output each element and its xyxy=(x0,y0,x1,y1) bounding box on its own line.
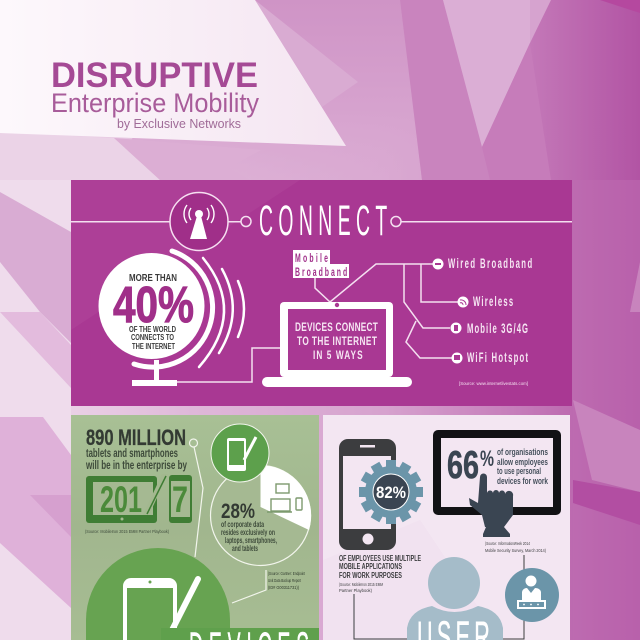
source xyxy=(485,541,546,554)
laptop text: TO THE INTERNET xyxy=(297,336,378,348)
stat text: employees: OF EMPLOYEES USE MULTIPLE xyxy=(339,554,421,563)
subtitle: Enterprise Mobility: Enterprise Mobility xyxy=(51,88,259,118)
icon: tablet 66%: 66 xyxy=(447,444,479,487)
icon: phone and pen circle xyxy=(211,424,269,482)
icon: 2017 tablet and phone: 201 xyxy=(100,479,142,520)
stat: more than 40% xyxy=(113,272,194,351)
stat: 28% circle: of corporate data xyxy=(221,520,264,529)
icon: phone and gear 82% xyxy=(339,439,423,550)
laptop text: IN 5 WAYS xyxy=(313,350,363,362)
icon: gear: 82% xyxy=(376,483,406,502)
icon: large phone circle xyxy=(86,548,230,640)
list: connection types xyxy=(432,257,532,366)
stat text: employees: FOR WORK PURPOSES xyxy=(339,571,402,580)
icon: tablet 66%: allow employees xyxy=(497,457,548,467)
icon: tablet 66% xyxy=(433,430,561,537)
source: (Source: MobileIron 2015 EMM Partner Playbook) xyxy=(85,529,169,534)
wired broadband: Wired Broadband xyxy=(448,257,532,272)
laptop text xyxy=(295,322,379,362)
source: (Source: Gartner: Endpoint xyxy=(268,571,305,577)
label: mobile broadband: Mobile xyxy=(295,252,328,266)
byline: by Exclusive Networks xyxy=(117,117,241,131)
globe xyxy=(98,251,244,386)
icon: 2017 tablet and phone xyxy=(86,474,192,523)
icon: tablet 66%: devices for work xyxy=(497,476,549,486)
source xyxy=(268,571,305,591)
icon: 2017 tablet and phone: 7 xyxy=(172,479,188,520)
source: Mobile Security Survey, March 2014) xyxy=(485,548,546,554)
stat: more than 40%: THE INTERNET xyxy=(132,342,175,351)
stat: 890 million: will be in the enterprise by xyxy=(85,458,187,472)
mobile 3g/4g: Mobile 3G/4G xyxy=(467,322,528,337)
wifi hotspot: WiFi Hotspot xyxy=(467,351,528,366)
icon: user figure xyxy=(407,557,503,640)
source: [Source: www.internetlivestats.com] xyxy=(459,381,528,386)
label: mobile broadband: Broadband xyxy=(295,266,347,280)
stat: 28% circle: 28% xyxy=(221,500,255,523)
icon: person at desk xyxy=(505,568,559,622)
stat: 28% circle: resides exclusively on xyxy=(221,528,275,537)
stat text: employees: MOBILE APPLICATIONS xyxy=(339,562,402,571)
icon: devices xyxy=(267,484,302,512)
banner: devices background xyxy=(161,628,319,640)
source: (Source: InformationWeek 2014 xyxy=(485,541,530,547)
heading: CONNECT: CONNECT xyxy=(259,198,387,245)
title block xyxy=(0,0,346,146)
stat: 890 million: tablets and smartphones xyxy=(86,446,178,460)
title: DISRUPTIVE: DISRUPTIVE xyxy=(51,56,258,95)
icon: tablet 66%: % xyxy=(480,446,494,471)
stat: more than 40%: MORE THAN xyxy=(129,272,177,284)
icon: tablet 66%: of organisations xyxy=(497,447,548,457)
label: mobile broadband xyxy=(293,250,349,280)
icon: tablet 66%: to use personal xyxy=(497,466,541,476)
source: Partner Playbook) xyxy=(339,588,372,594)
stat: more than 40%: CONNECTS TO xyxy=(131,333,174,342)
laptop text: DEVICES CONNECT xyxy=(295,322,379,334)
connector lines xyxy=(177,264,459,382)
icon: pointing hand xyxy=(469,474,513,527)
source: (ID# G00311731)) xyxy=(268,585,299,591)
stat: 890 million: 890 MILLION xyxy=(86,425,186,450)
stat: 28% circle: and tablets xyxy=(232,544,258,553)
stat: 890 million xyxy=(85,425,187,472)
stat text: employees xyxy=(339,554,421,580)
stat: 28% circle xyxy=(210,465,311,566)
panel: user xyxy=(323,415,570,640)
panel: devices xyxy=(71,415,319,640)
wireless: Wireless xyxy=(473,295,513,310)
source: Unit Data Backup Report xyxy=(268,578,301,584)
icon: antenna xyxy=(170,192,228,250)
source: (Source: MobileIron 2015 EMM xyxy=(339,582,383,588)
laptop xyxy=(262,302,412,387)
panel: connect xyxy=(71,180,572,406)
source xyxy=(339,582,383,594)
stat: 28% circle: laptops, smartphones, xyxy=(225,536,277,545)
stat: more than 40%: OF THE WORLD xyxy=(129,325,176,334)
stat: more than 40%: 40% xyxy=(113,276,194,333)
